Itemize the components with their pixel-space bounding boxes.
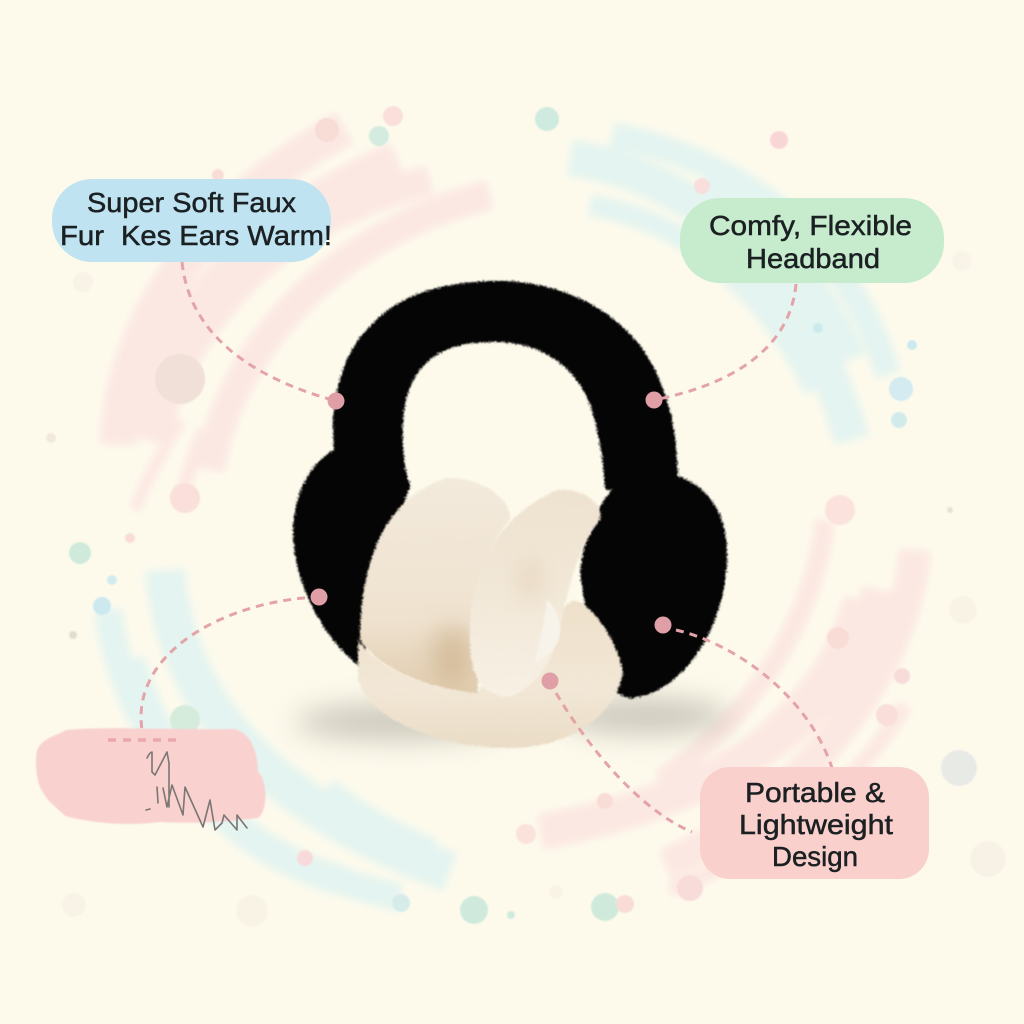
decorative splatter dots: [46, 106, 1006, 927]
earmuffs shadow: [295, 698, 730, 740]
black headband: [333, 281, 678, 490]
scribble glyph: [146, 752, 247, 830]
connector: bottom left: [141, 597, 319, 730]
paint swirl: top left pink: [118, 128, 490, 510]
callout: faux fur: Fur: [60, 220, 104, 251]
inner pad highlight: [535, 600, 560, 662]
paint swirl: bottom right pink: [540, 520, 915, 890]
callout: headband: Headband: [746, 243, 880, 274]
connector: top left: [182, 262, 336, 401]
paint swirl: bottom left teal: [108, 570, 450, 897]
callout: portable: Design: [772, 841, 858, 872]
earmuffs product illustration: [293, 281, 727, 748]
right pad shading: [520, 558, 540, 602]
black right ear cup: [580, 470, 727, 698]
paint swirl: top right teal: [570, 135, 888, 440]
dashed stub on label: [108, 738, 178, 742]
cream lower band: [358, 600, 623, 748]
callout: portable: [700, 767, 929, 879]
callout: headband: Comfy, Flexible: [709, 210, 912, 241]
connector: lower band: [556, 693, 692, 832]
cream right ear pad: [470, 490, 601, 697]
callout: faux fur: Kes Ears Warm!: [121, 220, 332, 251]
marker dots: [310, 392, 672, 690]
left pad brown shading: [432, 625, 472, 685]
cream left ear pad: [360, 478, 510, 695]
callout: faux fur: Super Soft Faux: [87, 187, 296, 218]
callout: blank pink brush label with scribble: [36, 728, 265, 830]
callout: headband: [680, 198, 944, 283]
callout: faux fur: [52, 179, 332, 262]
black left ear cup: [293, 448, 410, 667]
callout: portable: Portable &: [745, 777, 885, 808]
connector: right ear: [676, 630, 832, 768]
connector: top right: [654, 284, 796, 400]
callout: portable: Lightweight: [739, 809, 893, 840]
